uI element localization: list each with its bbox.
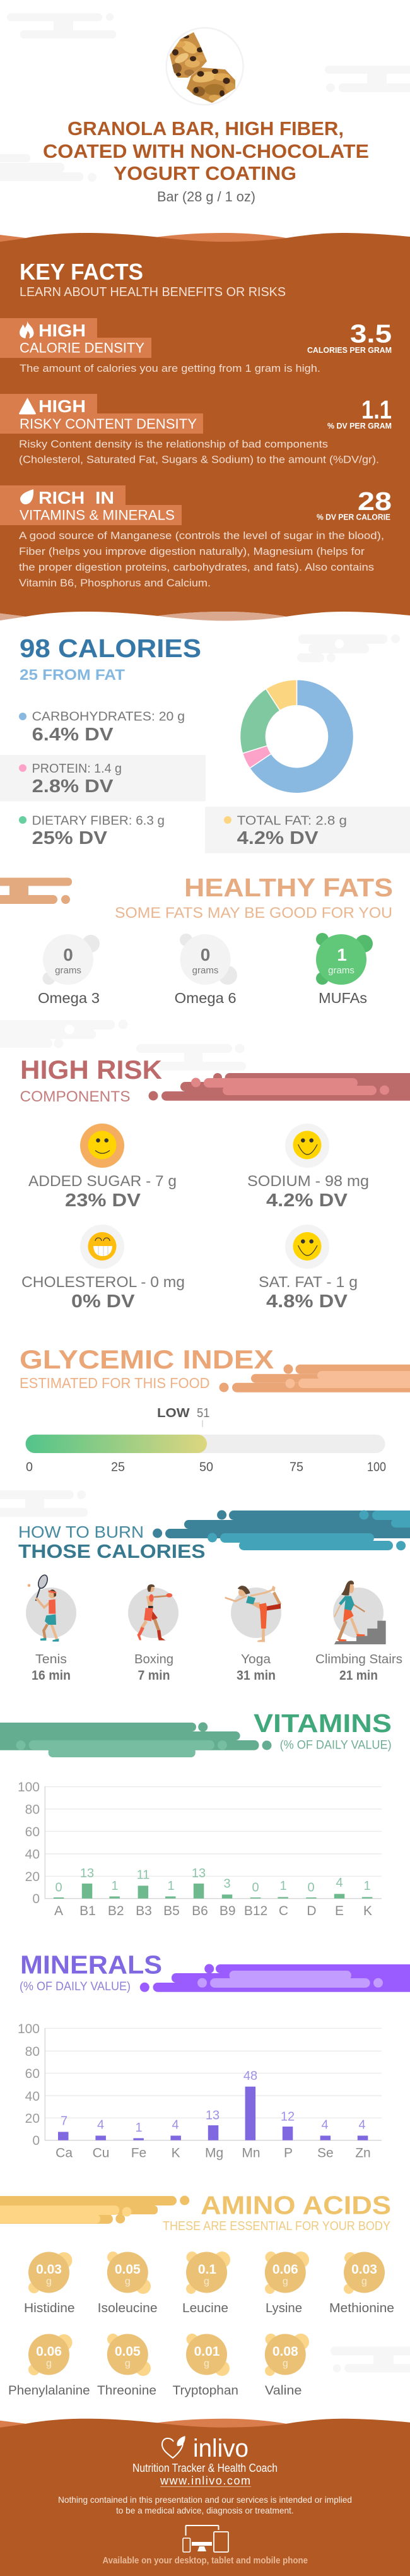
stat: 1.1 percent DV per gram: % DV PER GRAM [327,421,392,430]
gauge scale: 100 [367,1461,386,1475]
bar chart: minerals: 20 [25,2111,40,2126]
panel: healthy fats [0,873,393,1006]
stat: 3.5 calories per gram [307,319,392,355]
fact: rich in vitamins and minerals: Vitamin B6, Phosphorus and Calcium. [19,578,211,589]
legend: total fat: TOTAL FAT: 2.8 g [237,814,347,828]
bar chart: vitamins: B3 [136,1904,152,1918]
bar chart: minerals: 13 [206,2108,220,2122]
exercise: yoga: Yoga [241,1653,271,1666]
bar chart: vitamins: 11 [137,1868,149,1882]
amino: leucine: 0.1 [198,2262,216,2277]
subheading: THESE ARE ESSENTIAL FOR YOUR BODY [163,2219,390,2233]
amino: isoleucine: 0.05 [115,2262,141,2277]
bar chart: minerals: 7 [61,2115,67,2128]
gauge scale: 25 [111,1461,125,1475]
icon: yoga pose [225,1586,281,1642]
fact: rich in vitamins and minerals [0,485,392,589]
bar chart: minerals: 1 [135,2121,143,2135]
exercise: yoga [225,1586,281,1683]
bar chart: vitamins: B9 [220,1904,236,1918]
bar chart: vitamins: D [307,1904,317,1918]
bar chart: vitamins: 100 [18,1780,40,1795]
bar chart: minerals: 12 [281,2110,295,2123]
heading: HOW TO BURN [18,1522,144,1541]
bar chart: minerals: 48 [243,2069,257,2083]
bar chart: vitamins: 60 [25,1825,40,1839]
food image: granola bar [164,28,243,107]
legend: carbohydrates [19,710,185,745]
amino: tryptophan: 0.01 [194,2344,220,2359]
bar chart: vitamins: 20 [25,1870,40,1884]
component: saturated fat [259,1225,358,1312]
title: COATED WITH NON-CHOCOLATE [43,141,369,162]
bar chart: vitamins: 0 [55,1881,62,1895]
panel: calories [0,634,410,853]
amino: histidine: 0.03 [36,2262,62,2277]
bar chart: vitamins: 80 [25,1803,40,1817]
component: cholesterol: 0% DV [71,1291,135,1312]
panel: amino acids [0,2190,410,2397]
icon: warning [19,398,36,414]
heading: GLYCEMIC INDEX [20,1344,274,1374]
bar chart: vitamins: 13 [192,1867,206,1880]
fat: MUFAs: 1 [337,945,347,965]
decoration: vitamins band [0,1722,271,1757]
component: sodium: 4.2% DV [266,1190,348,1211]
disclaimer: to be a medical advice, diagnosis or treatment. [116,2505,294,2515]
fat: MUFAs [316,933,373,1006]
heading: VITAMINS [254,1709,392,1738]
amino: valine: 0.08 [272,2344,298,2359]
amino: histidine [24,2252,75,2315]
amino: tryptophan: g [204,2358,209,2369]
amino: phenylalanine [8,2334,90,2397]
bar chart: minerals: Zn [355,2146,371,2160]
fat: omega 3: grams [55,965,81,976]
amino: threonine: 0.05 [115,2344,141,2359]
logo: inlivo: inlivo [193,2435,249,2462]
fat: omega 6: grams [192,965,218,976]
bar chart: minerals: 80 [25,2045,40,2059]
exercise: climbing stairs [315,1581,402,1683]
fat: omega 3: 0 [63,945,73,965]
bar chart: minerals: 60 [25,2067,40,2081]
fact: rich in vitamins and minerals: RICH IN [38,488,114,507]
heading [18,1522,206,1562]
panel: vitamins [0,1709,392,1918]
gauge scale: 0 [26,1461,33,1475]
fact: risky content density: Risky Content density is the relationship of bad components [19,439,328,450]
amino: phenylalanine: Phenylalanine [8,2383,90,2397]
amino: isoleucine: g [125,2276,131,2287]
bar chart: vitamins: 0 [32,1892,40,1906]
amino: valine: g [283,2358,288,2369]
gauge scale [26,1461,386,1475]
bar chart: minerals: K [172,2146,180,2160]
panel: glycemic index [20,1344,410,1475]
amino: histidine: Histidine [24,2301,75,2315]
tagline: Nutrition Tracker & Health Coach [132,2462,278,2474]
stat: 3.5 calories per gram: CALORIES PER GRAM [307,345,392,355]
bar chart: minerals: Se [317,2146,334,2160]
amino: threonine [97,2334,156,2397]
bar chart: minerals: 4 [358,2118,366,2132]
amino: methionine [329,2252,394,2315]
heading: THOSE CALORIES [18,1540,206,1562]
bar chart: vitamins [18,1780,382,1918]
fact: rich in vitamins and minerals: Fiber (helps you improve digestion naturally), Magnesium (helps for [19,546,365,557]
bar chart: minerals: 4 [321,2118,329,2132]
bar chart: vitamins: 0 [307,1881,315,1895]
legend: total fat [205,807,410,853]
bar chart: minerals [18,2022,382,2160]
bar chart: vitamins: 0 [252,1881,259,1895]
panel: high risk components [0,1020,410,1312]
fact: rich in vitamins and minerals: A good source of Manganese (controls the level of sugar in the blood), [19,530,384,542]
exercise: tennis: 16 min [32,1668,71,1683]
decoration: minerals band [140,1964,410,1992]
fact: risky content density: HIGH [38,396,86,416]
subheading: (% OF DAILY VALUE) [20,1980,131,1993]
icon: tennis player [28,1574,59,1642]
fat: omega 6: Omega 6 [175,990,237,1006]
decoration: burn band [153,1510,410,1550]
bar chart: minerals: Fe [131,2146,146,2160]
bar chart: vitamins: C [279,1904,288,1918]
amino: methionine: g [361,2276,367,2287]
subheading: COMPONENTS [20,1088,130,1105]
marker: low 51: 51 [197,1406,209,1420]
panel: footer [0,2419,410,2576]
bar chart: minerals: Cu [93,2146,109,2160]
amino: isoleucine: Isoleucine [98,2301,158,2315]
disclaimer: Nothing contained in this presentation and our services is intended or implied [58,2495,352,2505]
stat: 1.1 percent DV per gram: 1.1 [361,395,392,424]
amino: threonine: Threonine [97,2383,156,2397]
amino: lysine: Lysine [266,2301,302,2315]
title: YOGURT COATING [114,163,296,184]
amino: leucine [182,2252,230,2315]
decoration: amino band [0,2195,189,2224]
bar chart: minerals: 40 [25,2089,40,2104]
bar chart: vitamins: K [363,1904,372,1918]
amino: lysine: 0.06 [272,2262,298,2277]
gauge bar [26,1435,385,1453]
fact: rich in vitamins and minerals: the proper digestion proteins, carbohydrates, and fats). Also contains [19,562,374,573]
exercise: climbing stairs: 21 min [339,1668,378,1683]
marker: low 51: LOW [157,1406,190,1420]
bar chart: vitamins: A [54,1904,63,1918]
fact: risky content density: (Cholesterol, Saturated Fat, Sugars & Sodium) to the amount (%DV/gr). [19,454,379,466]
icon: boxer [137,1584,172,1641]
title [43,118,369,184]
logo: inlivo [162,2435,249,2462]
fact: calorie density: The amount of calories you are getting from 1 gram is high. [20,363,320,374]
legend: protein: PROTEIN: 1.4 g [32,762,122,776]
amino: isoleucine [98,2252,158,2315]
legend: protein: 2.8% DV [32,776,114,797]
fact: rich in vitamins and minerals: VITAMINS & MINERALS [20,507,175,523]
amino: phenylalanine: g [46,2358,52,2369]
exercise: yoga: 31 min [237,1668,276,1683]
stat: 3.5 calories per gram: 3.5 [350,319,392,348]
amino: lysine [265,2252,309,2315]
legend: dietary fiber: 25% DV [32,828,108,848]
panel: how to burn those calories [0,1490,410,1683]
bar chart: vitamins: B6 [192,1904,208,1918]
bar chart: vitamins: E [335,1904,344,1918]
icon: flame [20,321,34,338]
serving size: Bar (28 g / 1 oz) [157,189,255,205]
amino: tryptophan [173,2334,238,2397]
subheading: SOME FATS MAY BE GOOD FOR YOU [115,905,392,922]
bar chart: minerals: Ca [56,2146,73,2160]
stat: 28 percent DV per calorie [317,487,392,522]
legend: total fat: 4.2% DV [237,828,319,848]
amino: valine [265,2334,309,2397]
bar chart: minerals: Mn [242,2146,261,2160]
legend: protein [0,755,206,802]
fat: omega 6: 0 [201,945,210,965]
bar chart: vitamins: 13 [80,1867,94,1880]
fat: omega 3: Omega 3 [38,990,100,1006]
subheading: LEARN ABOUT HEALTH BENEFITS OR RISKS [20,285,286,299]
heading: 98 calories: 98 CALORIES [20,634,201,663]
fat: omega 6 [175,934,237,1006]
heading: HIGH RISK [20,1055,162,1084]
amino: methionine: 0.03 [351,2262,377,2277]
fact: calorie density: CALORIE DENSITY [20,340,144,356]
icon: stair climber [334,1581,386,1644]
stat: 28 percent DV per calorie: 28 [358,487,392,516]
gauge scale: 75 [290,1461,303,1475]
stat: 28 percent DV per calorie: % DV PER CALORIE [317,513,390,522]
amino: leucine: Leucine [182,2301,228,2315]
heading: HEALTHY FATS [184,873,393,902]
bar chart: minerals: 4 [97,2118,104,2132]
component: cholesterol: CHOLESTEROL - 0 mg [21,1274,185,1291]
amino: valine: Valine [265,2383,302,2397]
decoration: healthy fats band [0,877,72,904]
bar chart: minerals: 100 [18,2022,40,2036]
bar chart: vitamins: B5 [163,1904,180,1918]
icon: leaf [20,489,33,504]
subheading: 25 from fat: 25 FROM FAT [20,667,125,684]
component: cholesterol [21,1225,185,1312]
bar chart: vitamins: 1 [279,1879,287,1893]
panel: key facts [0,233,410,621]
amino: threonine: g [125,2358,131,2369]
background clouds: header [0,13,410,182]
component: added sugar: ADDED SUGAR - 7 g [28,1173,177,1190]
amino: methionine: Methionine [329,2301,394,2315]
bar chart: vitamins: B12 [244,1904,267,1918]
component: sodium [247,1124,369,1211]
bar chart: vitamins: 4 [336,1876,343,1890]
exercise: boxing [128,1584,179,1683]
amino: histidine: g [46,2276,52,2287]
gauge scale: 50 [199,1461,213,1475]
component: added sugar [28,1124,177,1211]
subheading: (% OF DAILY VALUE) [280,1739,392,1752]
fact: risky content density [0,394,392,466]
exercise: tennis: Tenis [35,1653,67,1666]
fact: calorie density [0,318,392,374]
component: saturated fat: 4.8% DV [266,1291,348,1312]
bar chart: vitamins: B2 [108,1904,124,1918]
amino: phenylalanine: 0.06 [36,2344,62,2359]
amino: tryptophan: Tryptophan [173,2383,238,2397]
legend: carbohydrates: 6.4% DV [32,725,114,745]
availability note: Available on your desktop, tablet and mobile phone [102,2556,308,2566]
bar chart: minerals: 0 [32,2134,40,2148]
heading: MINERALS [20,1950,162,1979]
fat: MUFAs: MUFAs [319,990,367,1006]
exercise: climbing stairs: Climbing Stairs [315,1653,402,1666]
heading: AMINO ACIDS [201,2190,391,2219]
legend: dietary fiber [19,814,165,848]
donut chart [240,680,354,793]
exercise: boxing: 7 min [138,1668,170,1683]
legend: dietary fiber: DIETARY FIBER: 6.3 g [32,814,165,828]
bar chart: vitamins: 3 [223,1877,231,1891]
fact: risky content density: RISKY CONTENT DENSITY [20,416,197,432]
marker: low 51 [157,1406,209,1427]
bar chart: vitamins: 1 [167,1879,175,1893]
website link: www.inlivo.com [160,2474,250,2487]
component: saturated fat: SAT. FAT - 1 g [259,1274,358,1291]
title: GRANOLA BAR, HIGH FIBER, [67,118,344,139]
component: added sugar: 23% DV [65,1190,141,1211]
exercise: tennis [26,1574,76,1683]
decoration: high risk band [149,1073,410,1101]
subheading: ESTIMATED FOR THIS FOOD [20,1375,209,1391]
stat: 1.1 percent DV per gram [327,395,392,430]
amino: leucine: g [204,2276,209,2287]
amino: lysine: g [283,2276,288,2287]
component: sodium: SODIUM - 98 mg [247,1173,369,1190]
exercise: boxing: Boxing [134,1653,173,1666]
bar chart: minerals: Mg [205,2146,223,2160]
fact: calorie density: HIGH [38,321,86,340]
bar chart: vitamins: B1 [79,1904,96,1918]
bar chart: minerals: 4 [172,2118,179,2132]
panel: minerals [18,1950,410,2160]
fat: omega 3 [38,934,100,1006]
icon: devices [183,2526,228,2552]
bar chart: minerals: P [284,2146,293,2160]
fat: MUFAs: grams [328,965,354,976]
heading: key facts: KEY FACTS [20,259,143,285]
disclaimer [58,2495,352,2515]
bar chart: vitamins: 1 [363,1879,371,1893]
bar chart: vitamins: 40 [25,1847,40,1862]
legend: carbohydrates: CARBOHYDRATES: 20 g [32,710,185,724]
decoration: glycemic band [220,1365,410,1392]
bar chart: vitamins: 1 [111,1879,119,1893]
